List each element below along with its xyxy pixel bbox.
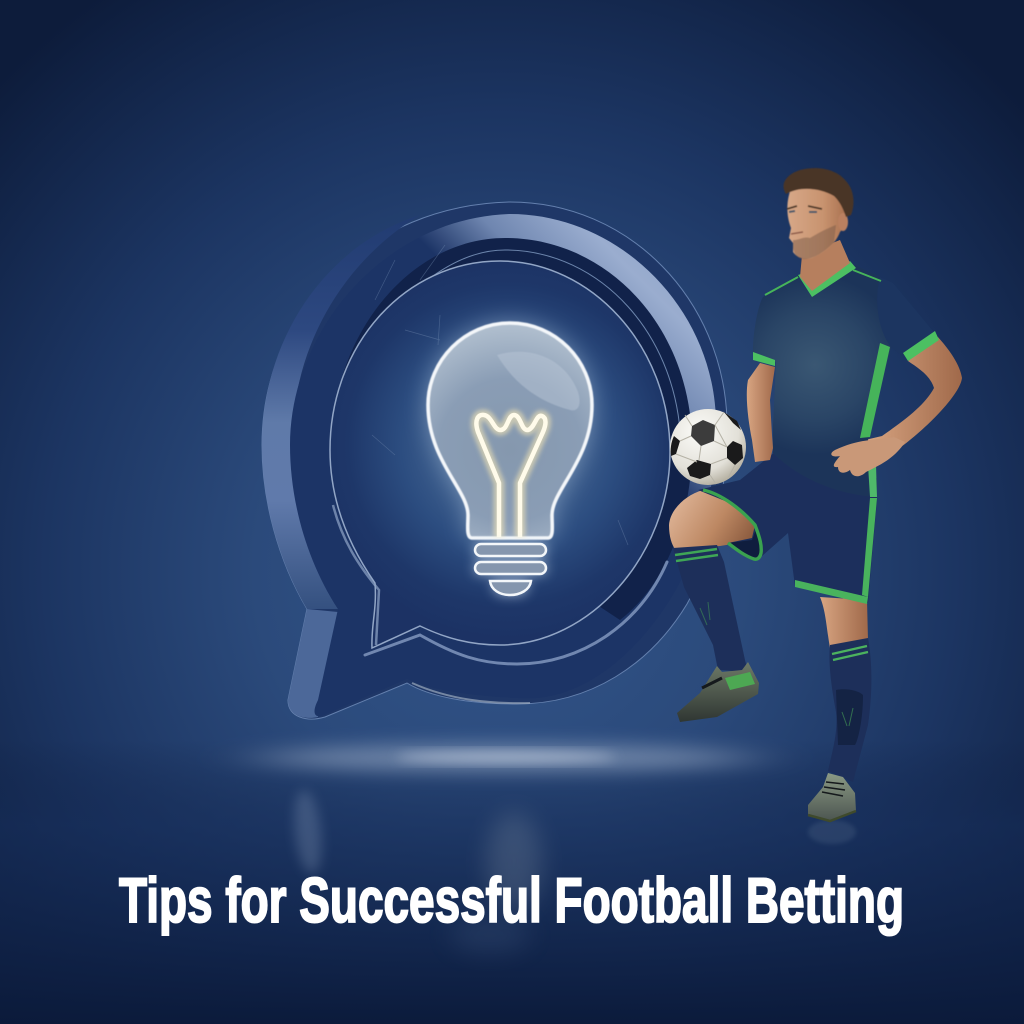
speech bubble bbox=[262, 202, 727, 719]
left extruded side bbox=[262, 215, 420, 609]
bulb base bbox=[475, 544, 546, 595]
left arm bbox=[747, 363, 775, 462]
hair bbox=[784, 168, 853, 217]
right sleeve bbox=[877, 277, 938, 361]
neck bbox=[800, 240, 850, 291]
ear bbox=[838, 213, 848, 231]
jersey body bbox=[753, 265, 891, 497]
raised thigh bbox=[669, 490, 758, 549]
inner panel bbox=[330, 261, 670, 648]
standing leg bbox=[820, 597, 868, 648]
side stripe bbox=[860, 343, 890, 438]
collar bbox=[798, 261, 856, 297]
mouth bbox=[791, 232, 803, 234]
filament bbox=[476, 415, 546, 537]
beard bbox=[793, 225, 836, 259]
shorts bbox=[698, 452, 877, 604]
jersey bbox=[753, 261, 939, 497]
cuffs bbox=[753, 331, 939, 366]
bulb base glow bbox=[475, 544, 546, 595]
panel scratches bbox=[372, 245, 628, 545]
bulb glass bbox=[428, 323, 592, 538]
face bbox=[787, 175, 847, 259]
floor light and reflections bbox=[256, 744, 856, 953]
football bbox=[670, 409, 746, 485]
under edge highlight bbox=[412, 683, 530, 703]
shoulder piping bbox=[765, 270, 881, 295]
lower stripe bbox=[868, 465, 877, 497]
head bbox=[784, 168, 853, 259]
recessed dark ring bbox=[332, 238, 692, 620]
bubble body bbox=[262, 202, 727, 719]
standing sock bbox=[828, 638, 871, 782]
eyes and brow bbox=[787, 206, 822, 209]
filament glow bbox=[476, 415, 546, 537]
lightbulb icon bbox=[428, 323, 592, 595]
bulb rim glow bbox=[428, 323, 592, 538]
raised boot bbox=[677, 662, 759, 722]
lower-left panel edge highlight bbox=[333, 505, 379, 645]
glass reflection bbox=[497, 352, 580, 410]
thin ring line bbox=[385, 250, 681, 450]
hand on hip bbox=[831, 437, 905, 476]
right arm bbox=[865, 335, 962, 470]
bulb glow bbox=[428, 323, 592, 538]
bubble front face bbox=[290, 214, 716, 716]
raised sock bbox=[673, 545, 748, 672]
football player bbox=[669, 168, 962, 821]
standing boot bbox=[808, 773, 856, 821]
tail side bbox=[288, 609, 338, 718]
lower ring highlight bbox=[365, 562, 667, 664]
